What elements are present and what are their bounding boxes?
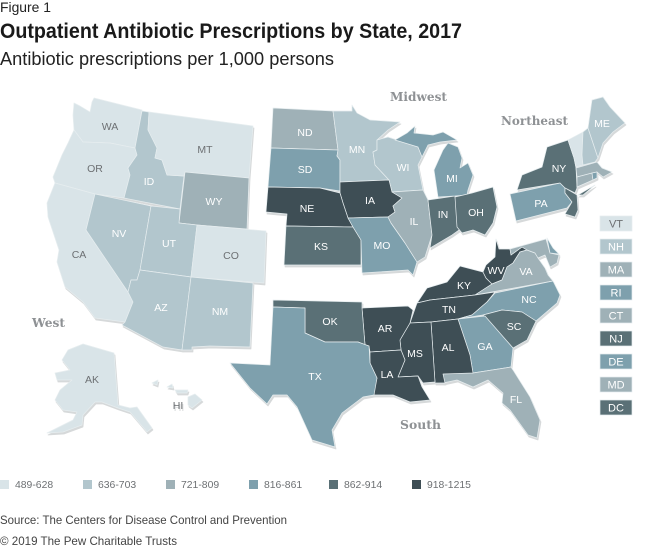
- state: IA: IA: [365, 195, 375, 207]
- key: MD: [600, 377, 632, 392]
- key: NH: NH: [608, 242, 624, 254]
- legend item: 721-809: 721-809: [181, 480, 219, 491]
- state: ND: [271, 108, 338, 150]
- state: HI: [152, 380, 202, 412]
- state: WV: [483, 239, 527, 284]
- state: MN: MN: [349, 144, 365, 156]
- state: KY: [417, 266, 492, 303]
- state: MS: [398, 322, 435, 383]
- state: OR: OR: [87, 163, 103, 175]
- map of states: [47, 97, 625, 447]
- state: LA: [370, 350, 430, 402]
- state: ID: [124, 111, 184, 209]
- region label: West: West: [31, 315, 65, 330]
- key: MD: MD: [607, 380, 625, 392]
- title: Outpatient Antibiotic Prescriptions by State, 2017: [0, 20, 462, 43]
- state: GA: GA: [477, 341, 493, 353]
- state: IL: IL: [410, 216, 419, 228]
- state: WV: WV: [488, 265, 504, 277]
- state: CO: [191, 225, 266, 283]
- state: IL: [388, 190, 432, 262]
- state: ME: ME: [594, 118, 610, 130]
- state: AZ: AZ: [154, 302, 168, 314]
- legend item: 489-628: 489-628: [15, 480, 53, 491]
- state: GA: [458, 316, 513, 373]
- state: TX: [230, 307, 377, 447]
- state: NV: NV: [112, 228, 126, 240]
- state: SD: SD: [298, 164, 313, 176]
- state: AK: [47, 344, 152, 433]
- state: OH: [455, 187, 497, 235]
- state: SC: SC: [507, 321, 522, 333]
- state: NY: [517, 140, 595, 195]
- region label: South: South: [400, 417, 441, 432]
- state: AR: AR: [378, 323, 393, 335]
- state: TN: [410, 292, 495, 323]
- legend item: 862-914: 862-914: [344, 480, 382, 491]
- state: AR: [362, 306, 413, 352]
- legend item: 918-1215: 918-1215: [427, 480, 471, 491]
- state: UT: UT: [162, 238, 177, 250]
- state: KY: KY: [457, 280, 471, 292]
- key: RI: [600, 285, 632, 300]
- key: NJ: NJ: [609, 334, 623, 346]
- key: NJ: [600, 331, 632, 346]
- state: NE: NE: [300, 203, 314, 215]
- state: PA: PA: [534, 198, 548, 210]
- state: FL: [443, 367, 540, 438]
- state: VT: [568, 132, 583, 167]
- state: KS: [284, 226, 361, 265]
- state: NM: NM: [212, 306, 228, 318]
- state: ME: [588, 97, 625, 158]
- state: NJ: [565, 188, 578, 217]
- key: RI: RI: [610, 288, 622, 300]
- key: DE: DE: [608, 356, 624, 368]
- copyright note: © 2019 The Pew Charitable Trusts: [0, 534, 177, 548]
- state: UT: [140, 206, 197, 277]
- state: SD: [268, 148, 340, 191]
- heading: figure number: Figure 1: [0, 0, 51, 15]
- key: DC: [600, 400, 632, 415]
- state: FL: FL: [510, 394, 522, 406]
- state: NC: [458, 281, 560, 321]
- key: CT: CT: [609, 310, 624, 322]
- state: AZ: [122, 270, 191, 350]
- state: NE: [266, 187, 353, 227]
- state: DE: [547, 238, 559, 254]
- state: SC: [483, 310, 536, 348]
- state: KS: KS: [314, 241, 328, 253]
- state: IA: [340, 180, 402, 218]
- state: TN: TN: [442, 304, 456, 316]
- key: VT: VT: [609, 218, 623, 230]
- state: MD: [510, 239, 559, 267]
- key: small northeastern states: [600, 216, 632, 415]
- state: WI: WI: [397, 162, 409, 174]
- state: NM: [182, 277, 253, 350]
- source note: Source: The Centers for Disease Control and Prevention: [0, 513, 287, 527]
- state: NC: NC: [521, 294, 537, 306]
- state: OR: [53, 130, 137, 198]
- key: CT: [600, 308, 632, 323]
- state: MO: MO: [374, 240, 390, 252]
- legend item: 816-861: 816-861: [264, 480, 302, 491]
- state: OK: [273, 300, 365, 345]
- state: MT: MT: [197, 144, 213, 156]
- state: MN: [333, 105, 400, 182]
- state: IN: IN: [438, 209, 448, 221]
- state: ID: ID: [144, 176, 155, 188]
- state: WY: [179, 172, 249, 229]
- key: VT: [600, 216, 632, 231]
- state: WA: WA: [102, 121, 118, 133]
- state: PA: [510, 183, 572, 221]
- state: MI: MI: [446, 173, 458, 185]
- state: OK: OK: [322, 316, 338, 328]
- state: ND: ND: [297, 127, 313, 139]
- state: AK: AK: [85, 374, 99, 386]
- key: DC: DC: [608, 402, 624, 414]
- state: IN: [428, 196, 459, 248]
- state: WA: [73, 98, 142, 148]
- state: VA: VA: [519, 266, 533, 278]
- state: MI: [395, 126, 473, 197]
- key: MA: [600, 262, 632, 277]
- state: WI: [373, 137, 423, 192]
- region label: Northeast: Northeast: [501, 113, 568, 128]
- state: CA: [47, 183, 133, 322]
- state: NH: [582, 128, 598, 165]
- state: WY: WY: [206, 196, 222, 208]
- state: MT: [148, 112, 253, 178]
- state: TX: TX: [308, 371, 322, 383]
- state: AL: [431, 319, 473, 383]
- state: RI: [592, 172, 597, 180]
- legend: [0, 480, 471, 491]
- state: NV: [86, 194, 151, 292]
- state: CA: CA: [72, 249, 86, 261]
- legend item: 636-703: 636-703: [98, 480, 136, 491]
- state: MA: [576, 162, 612, 177]
- state: VA: [475, 250, 553, 295]
- key: MA: MA: [608, 264, 625, 276]
- state: OH: OH: [468, 207, 484, 219]
- key: NH: [600, 239, 632, 254]
- state: MS: MS: [407, 348, 423, 360]
- state: LA: LA: [381, 369, 393, 381]
- state: CT: [577, 173, 593, 187]
- key: DE: [600, 354, 632, 369]
- region label: Midwest: Midwest: [390, 89, 447, 104]
- state: HI: HI: [173, 400, 183, 412]
- state: CO: CO: [223, 250, 239, 262]
- state: AL: AL: [442, 342, 455, 354]
- state: NY: NY: [552, 163, 566, 175]
- state: MO: [348, 217, 417, 275]
- subtitle: Antibiotic prescriptions per 1,000 persons: [0, 49, 334, 69]
